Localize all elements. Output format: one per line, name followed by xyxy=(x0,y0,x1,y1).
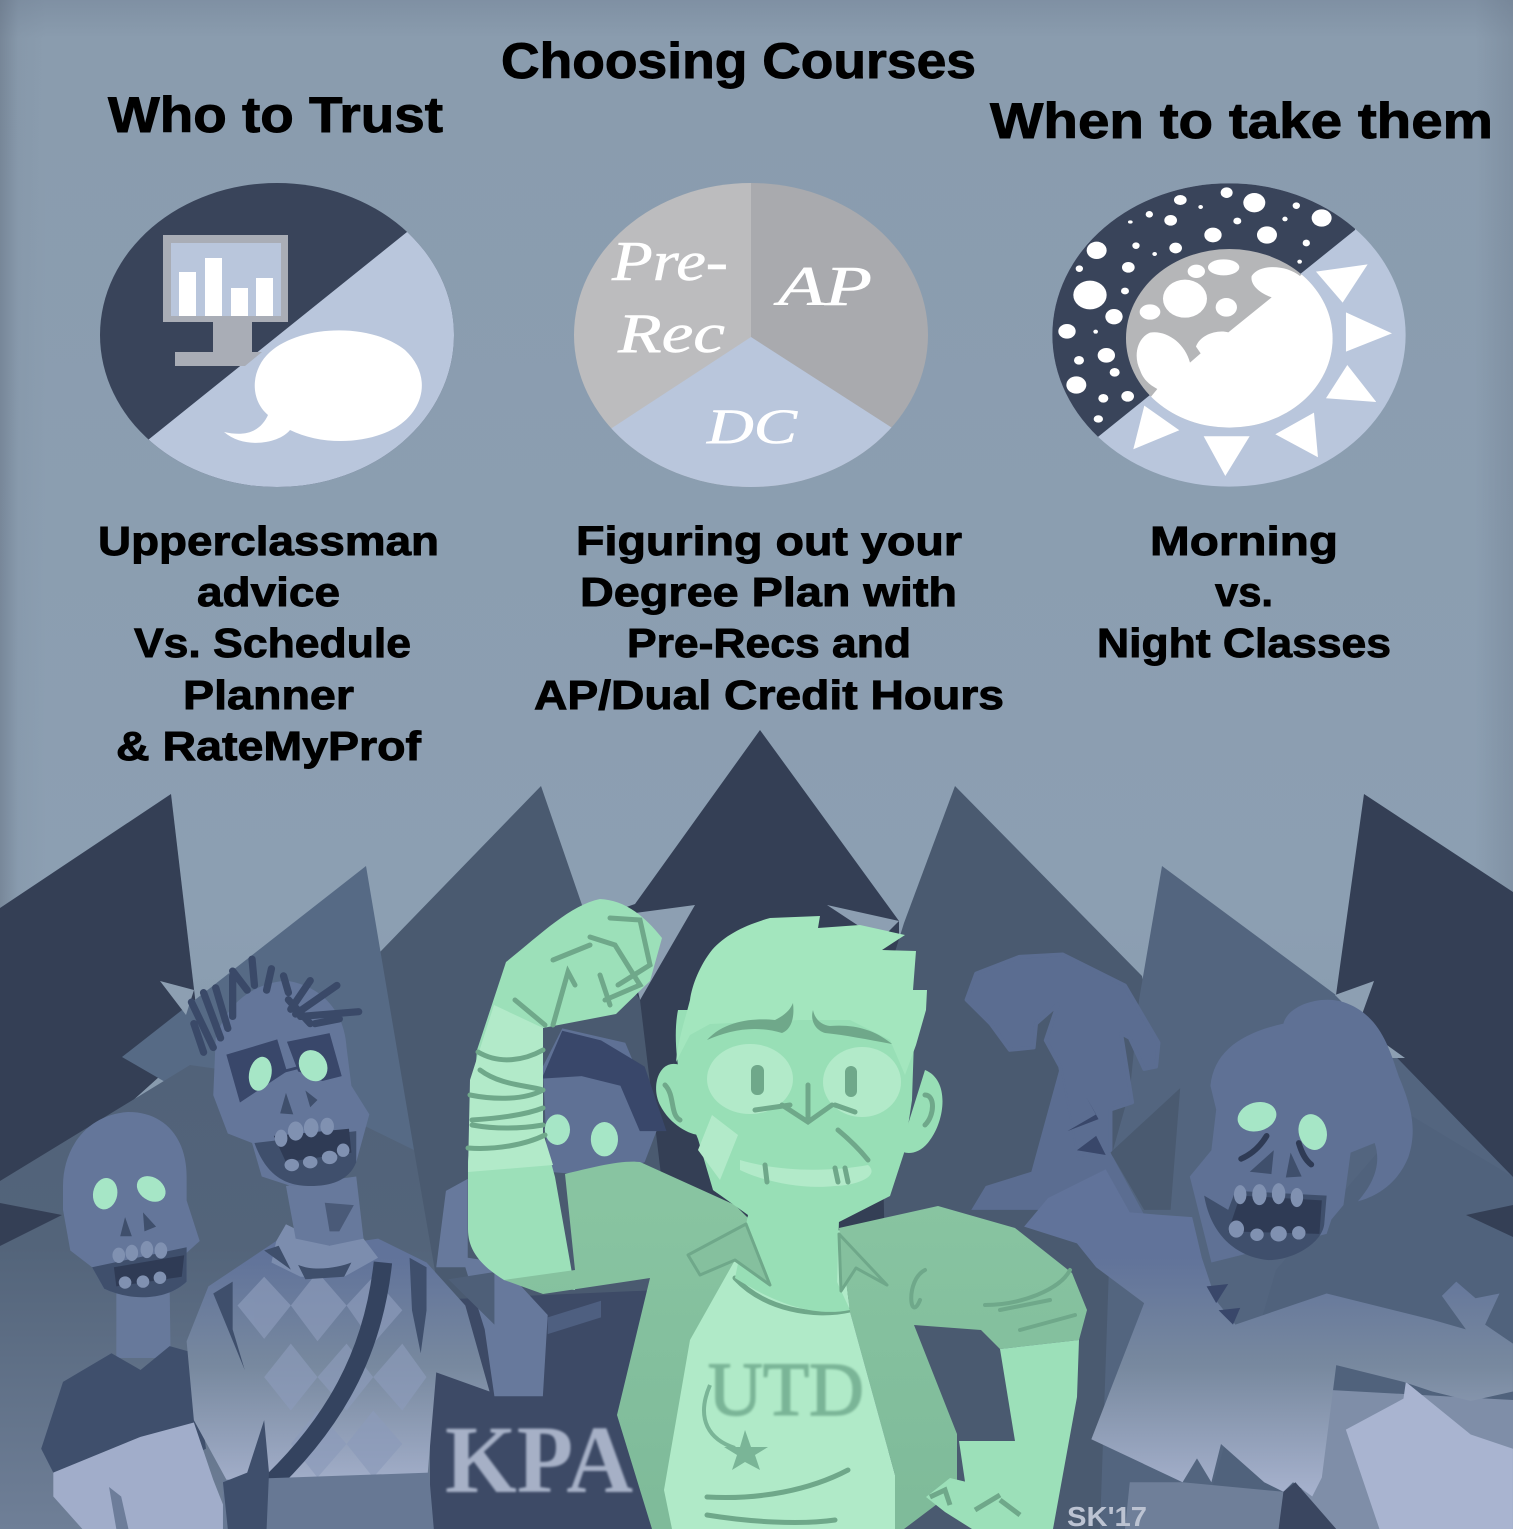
title: Choosing Courses xyxy=(501,33,976,89)
hero student xyxy=(468,899,1087,1529)
mountains background xyxy=(0,730,1513,1529)
text block: upperclassman advice: Upperclassman xyxy=(98,518,439,564)
text block: degree plan: AP/Dual Credit Hours xyxy=(534,672,1004,718)
icon: morning vs night circle xyxy=(1052,183,1406,487)
text block: degree plan: Degree Plan with xyxy=(580,569,957,615)
heading: when to take them: When to take them xyxy=(990,93,1493,149)
heading: who to trust: Who to Trust xyxy=(108,87,443,143)
zombie left: skull xyxy=(41,1112,233,1529)
hero neck and head xyxy=(656,916,942,1312)
icon: degree plan pie circle: AP xyxy=(773,256,872,318)
hero t-shirt xyxy=(664,1230,895,1529)
text block: upperclassman advice xyxy=(98,518,439,769)
hero t-shirt: UTD xyxy=(708,1348,864,1432)
text block: morning vs night xyxy=(1097,518,1391,666)
hero jacket left xyxy=(504,1162,770,1529)
watermark: KPA: KPA xyxy=(445,1406,633,1513)
icon: degree plan pie circle: DC xyxy=(706,398,798,454)
zombie behind arm xyxy=(542,1028,666,1176)
icon: degree plan pie circle: Rec xyxy=(617,303,725,365)
zombie right: raised fist xyxy=(966,954,1180,1215)
text block: degree plan: Pre-Recs and xyxy=(627,620,911,666)
text block: upperclassman advice: Planner xyxy=(183,672,354,718)
text block: upperclassman advice: Vs. Schedule xyxy=(134,620,411,666)
hero jacket right and sleeve xyxy=(688,1206,1087,1529)
icon: degree plan pie circle xyxy=(574,183,928,487)
text block: degree plan xyxy=(534,518,1004,718)
icon: degree plan pie circle: Pre- xyxy=(611,231,728,293)
text block: upperclassman advice: & RateMyProf xyxy=(116,723,421,769)
icon: advice vs schedule planner circle xyxy=(100,183,454,487)
zombie middle: glasses and argyle sweater xyxy=(187,959,601,1529)
text block: upperclassman advice: advice xyxy=(197,569,340,615)
text block: morning vs night: Night Classes xyxy=(1097,620,1391,666)
hero arm with bandage and fist xyxy=(468,899,662,1290)
text block: morning vs night: Morning xyxy=(1150,518,1338,564)
text block: degree plan: Figuring out your xyxy=(576,518,962,564)
text block: morning vs night: vs. xyxy=(1215,569,1273,615)
zombie right: lurching figure xyxy=(1024,1000,1513,1529)
